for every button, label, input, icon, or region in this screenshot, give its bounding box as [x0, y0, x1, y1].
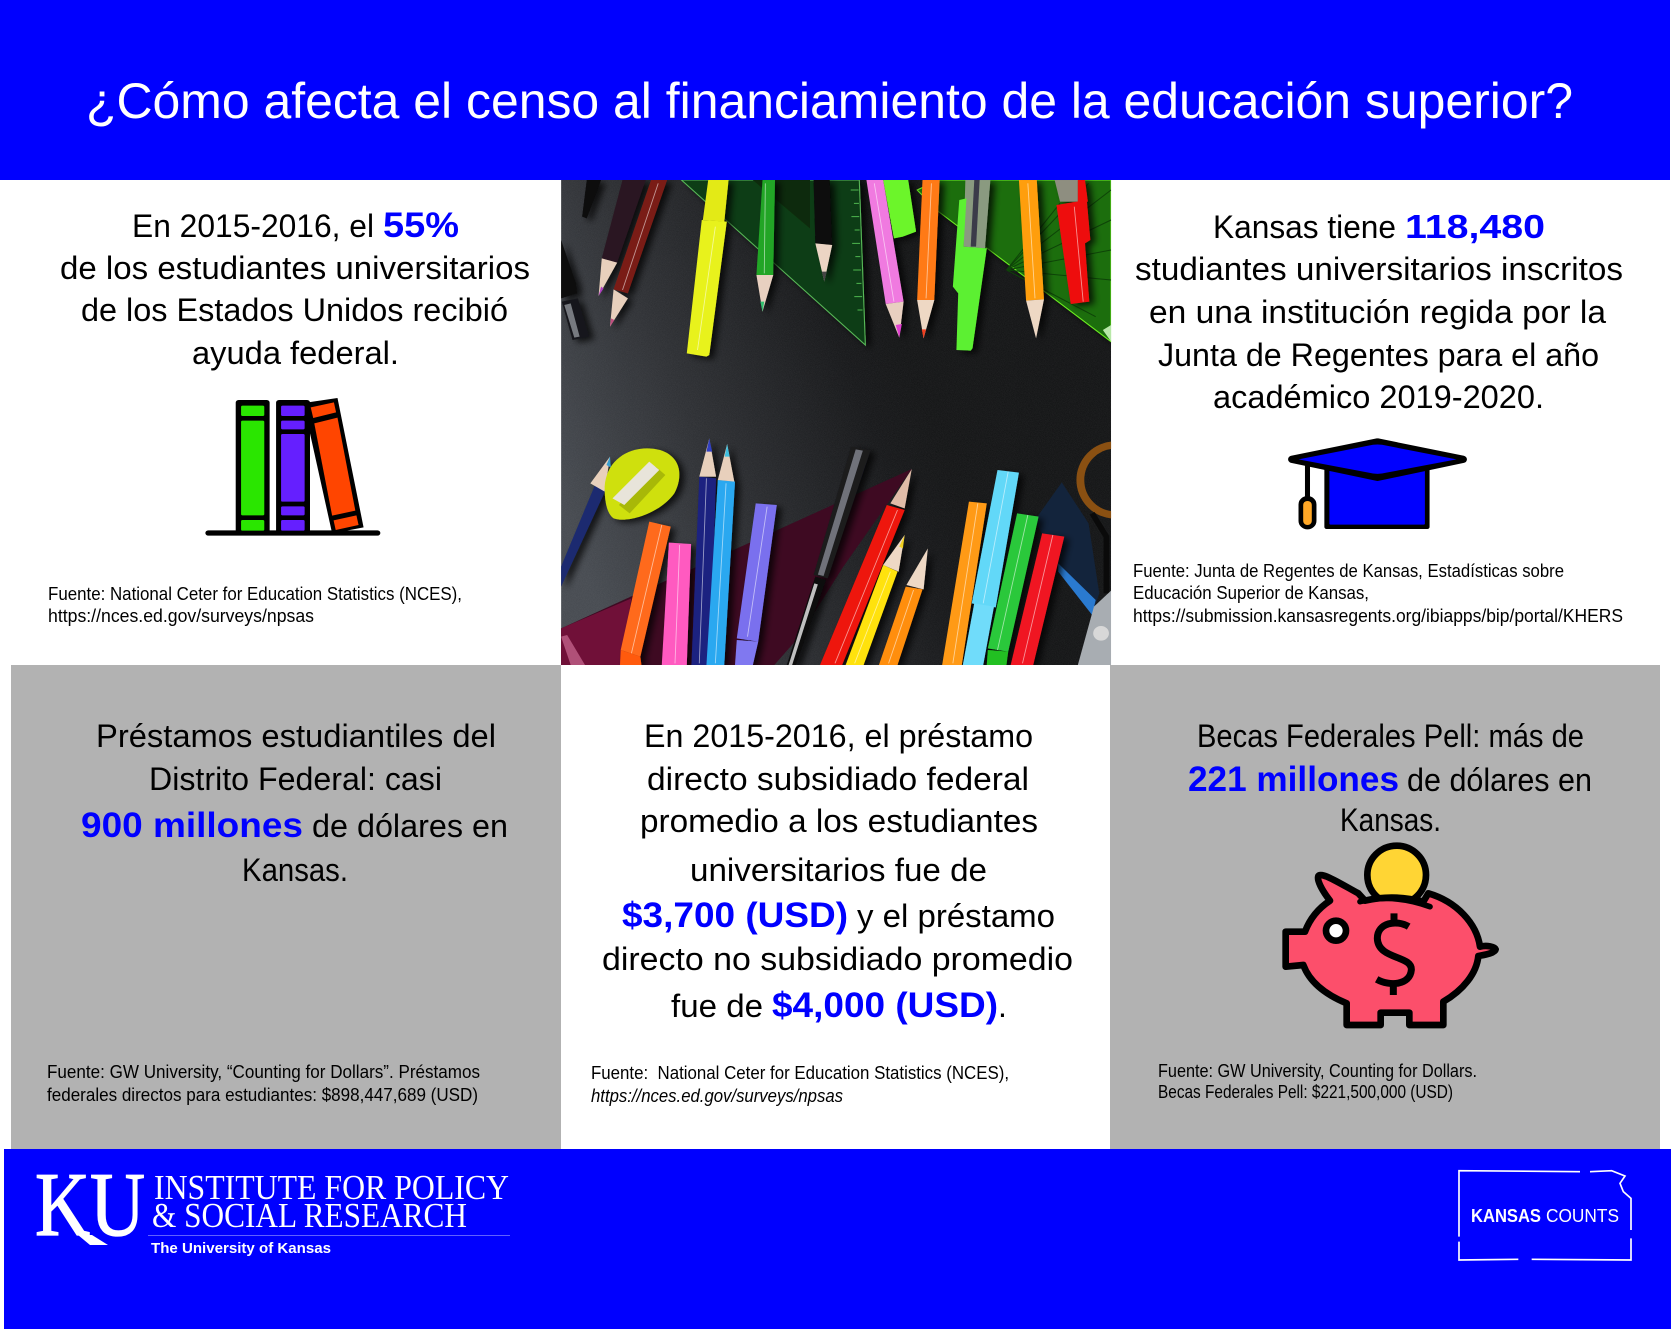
statement text: promedio a los estudiantes: [640, 803, 1038, 839]
statement text: ayuda federal.: [192, 335, 399, 371]
statement text: [1135, 208, 1623, 415]
statement text: fue de: [671, 988, 763, 1024]
source note: Becas Federales Pell: $221,500,000 (USD): [1158, 1082, 1453, 1102]
statement text: [81, 718, 508, 888]
statement text: Distrito Federal: casi: [149, 761, 442, 797]
source note: [1158, 1061, 1477, 1102]
statement text: de los Estados Unidos recibió: [81, 292, 508, 328]
bottom rulers: [561, 469, 912, 665]
statement text: En 2015-2016, el préstamo: [644, 718, 1033, 754]
statement text: Préstamos estudiantiles del: [96, 718, 496, 754]
panel: Pell grants: [1110, 665, 1660, 1149]
statement text: Kansas.: [1340, 802, 1441, 838]
icon: books: [205, 398, 380, 536]
statement text: $3,700 (USD): [622, 896, 848, 935]
source note: [1133, 561, 1623, 626]
source note: federales directos para estudiantes: $898,447,689 (USD): [47, 1085, 478, 1105]
statement text: En 2015-2016, el: [132, 208, 374, 244]
statement text: de dólares en: [1407, 762, 1592, 798]
source note: [47, 1062, 480, 1105]
top pencils and markers: [703, 180, 729, 222]
statement text: en una institución regida por la: [1149, 294, 1606, 330]
photo: school supplies on dark background: [561, 180, 1150, 665]
source note: Fuente: GW University, Counting for Dollars.: [1158, 1061, 1477, 1081]
panel: 118,480 students: [1133, 208, 1623, 626]
statement text: Kansas tiene: [1213, 209, 1396, 245]
statement text: [602, 718, 1073, 1025]
statement text: directo subsidiado federal: [647, 761, 1029, 797]
logo: KU Institute for Policy and Social Research: [35, 1154, 510, 1257]
panel: 55 percent federal aid: [48, 206, 530, 626]
statement text: Junta de Regentes para el año: [1158, 337, 1599, 373]
source note: Fuente: GW University, “Counting for Dollars”. Préstamos: [47, 1062, 480, 1082]
source note: https://submission.kansasregents.org/ibiapps/bip/portal/KHERS: [1133, 606, 1623, 626]
source note: Fuente: National Ceter for Education Statistics (NCES),: [48, 584, 462, 604]
statement text: de los estudiantes universitarios: [60, 250, 530, 286]
logo: Kansas Counts: COUNTS: [1546, 1206, 1619, 1226]
source note: Fuente: National Ceter for Education Statistics (NCES),: [591, 1063, 1009, 1083]
source note: https://nces.ed.gov/surveys/npsas: [591, 1086, 843, 1106]
scissors: [1076, 442, 1112, 518]
source note: Fuente: Junta de Regentes de Kansas, Estadísticas sobre: [1133, 561, 1564, 581]
title: ¿Cómo afecta el censo al financiamiento de la educación superior?: [86, 72, 1573, 129]
statement text: $4,000 (USD): [772, 986, 998, 1025]
statement text: universitarios fue de: [690, 852, 987, 888]
statement text: de dólares en: [312, 808, 508, 844]
top left items: [561, 180, 1090, 357]
statement text: [1188, 718, 1592, 838]
footer banner: [4, 1149, 1671, 1329]
statement text: directo no subsidiado promedio: [602, 941, 1073, 977]
bottom left pencil and sharpener: [561, 448, 679, 587]
logo: KU Institute for Policy and Social Research: & SOCIAL RESEARCH: [152, 1196, 467, 1235]
statement text: Kansas.: [242, 852, 348, 888]
statement text: 118,480: [1405, 208, 1545, 245]
top rulers: [681, 180, 1111, 345]
statement text: [60, 206, 530, 371]
statement text: studiantes universitarios inscritos: [1135, 251, 1623, 287]
statement text: 900 millones: [81, 806, 303, 845]
logo: KU Institute for Policy and Social Research: INSTITUTE FOR POLICY: [154, 1168, 509, 1207]
statement text: Becas Federales Pell: más de: [1197, 718, 1584, 754]
statement text: académico 2019-2020.: [1213, 379, 1544, 415]
icon: piggy bank: [1286, 846, 1496, 1025]
statement text: y el préstamo: [857, 898, 1055, 934]
bottom pencils and markers: [620, 438, 1064, 665]
panel: average loans: [591, 718, 1073, 1106]
source note: Educación Superior de Kansas,: [1133, 583, 1369, 603]
statement text: .: [998, 988, 1007, 1024]
logo: Kansas Counts: [1459, 1171, 1631, 1260]
icon: graduation cap: [1292, 442, 1463, 529]
panel: student loans: [11, 665, 561, 1149]
header banner: [0, 0, 1670, 180]
statement text: 55%: [383, 206, 459, 245]
logo: KU Institute for Policy and Social Research: KU: [35, 1154, 145, 1255]
logo: Kansas Counts: KANSAS: [1471, 1206, 1541, 1226]
source note: [48, 584, 462, 626]
pencil and marker highlights: [622, 183, 1083, 663]
logo: KU Institute for Policy and Social Research: The University of Kansas: [151, 1240, 331, 1257]
statement text: 221 millones: [1188, 760, 1399, 799]
source note: [591, 1063, 1009, 1106]
source note: https://nces.ed.gov/surveys/npsas: [48, 606, 314, 626]
